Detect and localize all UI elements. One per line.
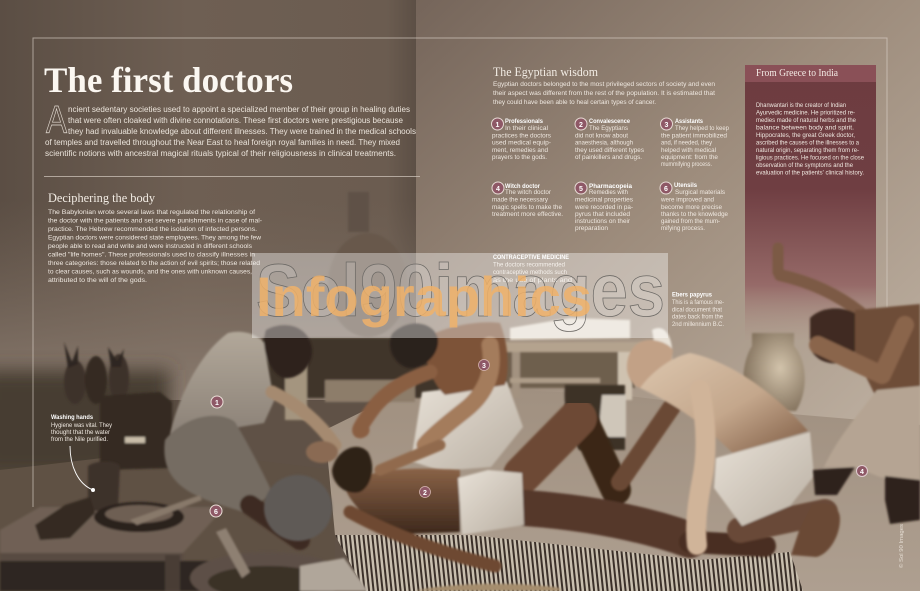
back table with scrolls bbox=[262, 318, 642, 420]
note 5: Pharmacopeia: pyrus that included bbox=[575, 211, 630, 218]
note 6: Utensils: mifying process. bbox=[661, 225, 705, 232]
note 5: Pharmacopeia: preparation bbox=[575, 225, 608, 232]
note 3: Assistants: and, if needed, they bbox=[661, 140, 713, 146]
amphora behind the scene bbox=[328, 192, 408, 337]
panel background: red column bbox=[745, 65, 876, 340]
figure 5: kneeling doctor bbox=[620, 328, 840, 557]
note 6: Utensils: were improved and bbox=[660, 196, 714, 204]
note 1: Professionals: used medical equip- bbox=[492, 140, 551, 146]
note 2: Convalescence bbox=[575, 118, 645, 161]
section: Deciphering the body: called "life homes". These professionals used to classify illnesses in bbox=[48, 252, 255, 258]
note 5: Pharmacopeia: Pharmacopeia bbox=[589, 183, 632, 190]
section: Deciphering the body: practice. The Hebrew recommended the isolation of infected persons. bbox=[48, 226, 257, 233]
note 2: Convalescence: of painkillers and drugs. bbox=[575, 154, 642, 161]
note 6: Utensils: 6 bbox=[664, 186, 668, 193]
figure 1: woman doctor bbox=[164, 325, 338, 540]
panel: From Greece to India: evaluation of the patients' clinical history. bbox=[756, 170, 864, 176]
note 4: Witch doctor: magic spells to make the bbox=[492, 204, 562, 211]
intro text: of temples and travelled throughout the Near East to heal foreign royal families in need. They mixed bbox=[45, 138, 400, 147]
panel: From Greece to India: ligious practices. He focused on the close bbox=[756, 154, 864, 162]
frame line bbox=[33, 38, 887, 507]
woven basket bbox=[565, 385, 626, 450]
section: The Egyptian wisdom: Egyptian doctors belonged to the most privileged sectors of society and even bbox=[493, 81, 715, 88]
mat bbox=[335, 535, 803, 591]
note 4: Witch doctor: treatment more effective. bbox=[492, 211, 563, 218]
low table with utensils bbox=[0, 462, 560, 591]
note: Ebers papyrus: This is a famous me- bbox=[672, 299, 724, 306]
section: Deciphering the body: the doctor with the patients and set severe punishments in case of mal- bbox=[48, 218, 262, 224]
note: Ebers papyrus bbox=[672, 292, 724, 328]
label 6: 6 bbox=[214, 509, 218, 516]
note 2: Convalescence: anaesthesia, although bbox=[575, 140, 633, 146]
figure 3: assistant bbox=[360, 322, 523, 471]
amphora on right floor bbox=[743, 333, 805, 411]
intro text: that were often cloaked with divine connotations. These first doctors were prestigious because bbox=[68, 116, 404, 125]
panel: From Greece to India: ascribed the causes of the illnesses to a bbox=[756, 140, 859, 146]
section: The Egyptian wisdom: they could have been able to heal certain types of cancer. bbox=[493, 99, 656, 106]
section: Deciphering the body: The Babylonian wrote several laws that regulated the relationship of bbox=[48, 209, 255, 216]
note 3: Assistants: 3 bbox=[665, 122, 669, 129]
panel: From Greece to India: observation of the symptoms and the bbox=[756, 162, 853, 169]
note 3: Assistants: Assistants bbox=[675, 118, 703, 125]
note: contraceptive medicine: CONTRACEPTIVE MEDICINE bbox=[493, 254, 569, 261]
figure 4: witch doctor bbox=[778, 248, 920, 524]
section: Deciphering the body: people able to read and write and were instructed in different schools bbox=[48, 243, 253, 250]
note 1: Professionals: practices the doctors bbox=[492, 132, 552, 140]
watermark: Sol90images bbox=[256, 249, 665, 332]
note: contraceptive medicine: as the use of plants and bbox=[493, 277, 572, 284]
panel: From Greece to India: Ayurvedic medicine. He prioritized re- bbox=[756, 110, 855, 116]
note 1: Professionals: prayers to the gods. bbox=[492, 154, 547, 161]
section: Deciphering the body: three categories: those related to the action of evil spirits; those related bbox=[48, 260, 260, 267]
note 1: Professionals: 1 bbox=[496, 122, 500, 129]
panel: From Greece to India: natural origin, separating them from re- bbox=[756, 147, 859, 154]
note 5: Pharmacopeia: medicinal properties bbox=[575, 196, 634, 204]
jars and plants on left shelf bbox=[64, 342, 172, 470]
note 6: Utensils: Surgical materials bbox=[675, 189, 726, 196]
label 4: 4 bbox=[860, 469, 864, 476]
note: Ebers papyrus: Ebers papyrus bbox=[672, 292, 712, 298]
callout: Washing hands: Washing hands bbox=[51, 414, 93, 421]
intro text: A bbox=[46, 99, 67, 142]
note 6: Utensils: gained from the mum- bbox=[661, 218, 720, 225]
panel: From Greece to India bbox=[745, 65, 876, 176]
note 5: Pharmacopeia bbox=[574, 182, 634, 232]
callout: Washing hands: Hygiene was vital. They bbox=[51, 422, 113, 429]
watermark: Infographics bbox=[256, 265, 592, 328]
label 1: 1 bbox=[215, 400, 219, 407]
note 6: Utensils bbox=[660, 182, 728, 232]
note 2: Convalescence: Convalescence bbox=[589, 118, 630, 125]
note 3: Assistants: mummifying process. bbox=[661, 161, 712, 168]
note: contraceptive medicine bbox=[493, 254, 572, 284]
note 4: Witch doctor: Witch doctor bbox=[505, 183, 540, 190]
label 3 bbox=[478, 360, 490, 370]
label 4 bbox=[856, 466, 868, 476]
section: Deciphering the body: Deciphering the body bbox=[48, 190, 155, 205]
note 4: Witch doctor bbox=[492, 182, 563, 218]
note 1: Professionals: Professionals bbox=[505, 118, 543, 125]
section: The Egyptian wisdom: The Egyptian wisdom bbox=[493, 64, 598, 79]
intro text: ncient sedentary societies used to appoint a specialized member of their group in healing duties bbox=[68, 105, 410, 114]
intro text: they had invaluable knowledge about different illnesses. They were trained in the medical schools bbox=[68, 127, 416, 136]
callout: Washing hands: from the Nile purified. bbox=[51, 436, 108, 443]
title: The first doctors bbox=[44, 60, 293, 100]
panel: From Greece to India: medies made of natural herbs and the bbox=[756, 117, 856, 124]
note 5: Pharmacopeia: Remedies with bbox=[589, 189, 628, 196]
section: Deciphering the body: Egyptian doctors were considered state employees. They among the few bbox=[48, 234, 261, 242]
section: The Egyptian wisdom bbox=[493, 64, 715, 106]
note: contraceptive medicine: The doctors recommended bbox=[493, 262, 565, 268]
label 2 bbox=[420, 486, 430, 498]
note 6: Utensils: thanks to the knowledge bbox=[661, 211, 728, 218]
note: contraceptive medicine: contraceptive methods such bbox=[493, 269, 567, 276]
panel: From Greece to India: Dhanwantari is the creator of Indian bbox=[756, 102, 846, 109]
callout: Washing hands bbox=[51, 414, 113, 492]
note: Ebers papyrus: dical document that bbox=[672, 306, 722, 314]
label 1 bbox=[211, 396, 223, 408]
note 3: Assistants bbox=[660, 118, 729, 168]
section: Deciphering the body: attributed to the will of the gods. bbox=[48, 277, 147, 284]
note 5: Pharmacopeia: instructions on their bbox=[575, 218, 631, 225]
panel: From Greece to India: From Greece to India bbox=[756, 68, 839, 79]
label 3: 3 bbox=[482, 363, 486, 370]
section: Deciphering the body: to clear causes, such as wounds, and the ones with unknown causes, bbox=[48, 268, 252, 276]
note 3: Assistants: equipment: from the bbox=[661, 154, 718, 161]
intro text bbox=[45, 99, 416, 158]
panel: From Greece to India: Hippocrates, the great Greek doctor, bbox=[756, 132, 855, 139]
callout: Washing hands: thought that the water bbox=[51, 429, 111, 436]
note 3: Assistants: helped with medical bbox=[661, 147, 716, 154]
note 5: Pharmacopeia: were recorded in pa- bbox=[574, 204, 633, 211]
section: Deciphering the body bbox=[48, 190, 262, 284]
note 1: Professionals bbox=[492, 118, 552, 161]
note: Ebers papyrus: 2nd millennium B.C. bbox=[672, 321, 724, 328]
note 2: Convalescence: The Egyptians bbox=[589, 125, 629, 132]
note 2: Convalescence: they used different types bbox=[575, 147, 645, 154]
note 4: Witch doctor: The witch doctor bbox=[505, 189, 552, 196]
note 6: Utensils: become more precise bbox=[661, 204, 722, 211]
note 6: Utensils: Utensils bbox=[674, 182, 697, 189]
copyright: © Sol 90 Images bbox=[898, 524, 905, 568]
figure 2: patient bbox=[332, 418, 765, 566]
pillow bbox=[264, 475, 332, 541]
section: The Egyptian wisdom: their aspect was different from the rest of the population. It is estimated that bbox=[493, 90, 715, 97]
note 1: Professionals: In their clinical bbox=[505, 125, 549, 132]
label 6 bbox=[210, 505, 222, 517]
note 2: Convalescence: did not know about bbox=[575, 132, 628, 140]
note: Ebers papyrus: dates back from the bbox=[672, 314, 723, 320]
note 1: Professionals: ment, remedies and bbox=[492, 147, 548, 154]
panel: From Greece to India: balance between body and spirit. bbox=[756, 124, 854, 132]
note 4: Witch doctor: 4 bbox=[496, 186, 500, 193]
note 5: Pharmacopeia: 5 bbox=[579, 186, 583, 193]
note 2: Convalescence: 2 bbox=[579, 122, 583, 129]
label 2: 2 bbox=[423, 490, 427, 497]
note 3: Assistants: the patient immobilized bbox=[661, 132, 727, 140]
note 3: Assistants: They helped to keep bbox=[675, 125, 729, 132]
intro text: scientific notions with ancestral magical rituals typical of their religiousness in clinical treatments. bbox=[45, 149, 396, 158]
note 4: Witch doctor: made the necessary bbox=[492, 196, 549, 204]
